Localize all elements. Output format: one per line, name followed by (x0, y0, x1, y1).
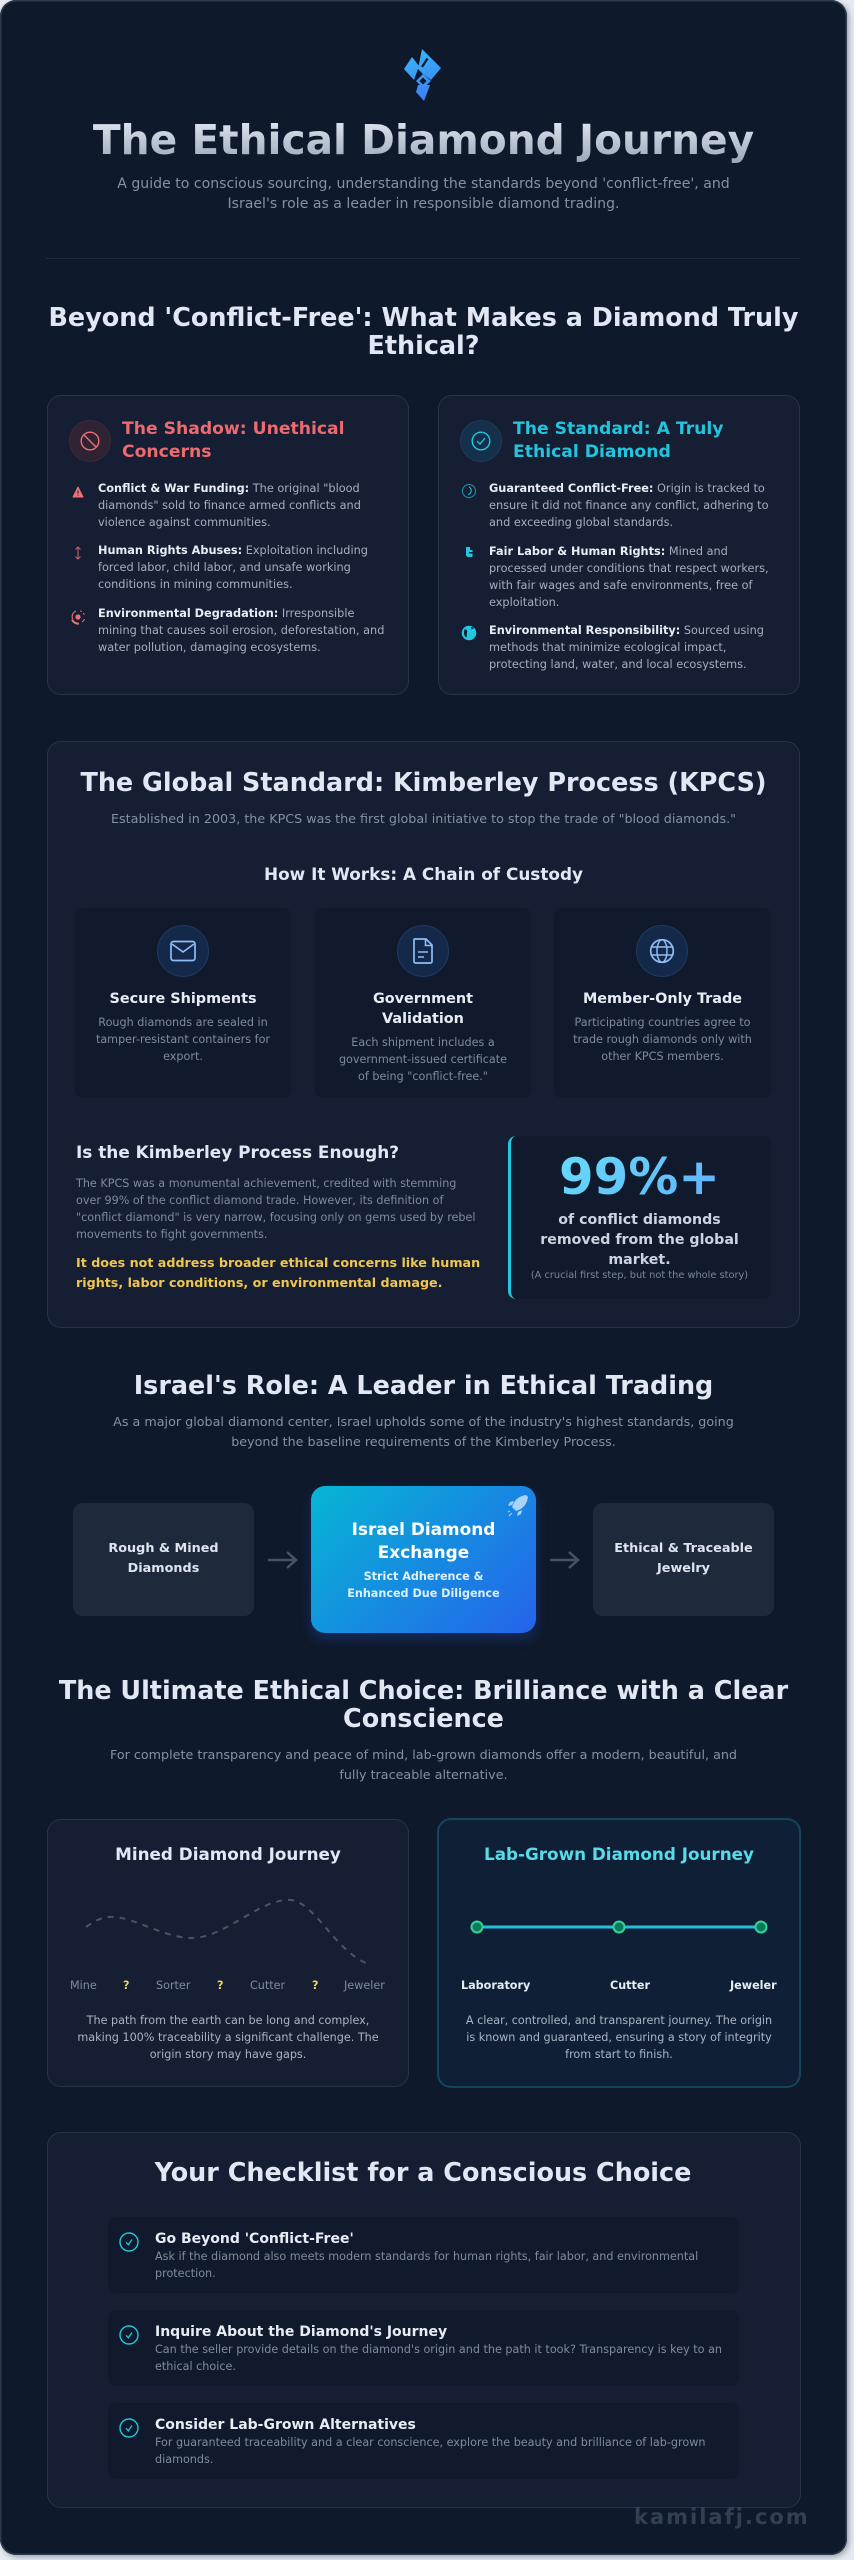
icon: check circle (460, 420, 502, 462)
text: environmental responsibility: methods that minimize ecological impact, (489, 640, 726, 654)
choice intro: For complete transparency and peace of mind, lab-grown diamonds offer a modern, beautiful, and (110, 1747, 737, 1762)
item text (155, 2248, 698, 2282)
icon: envelope (157, 925, 209, 977)
label: Jeweler (730, 1979, 777, 1992)
subheading: chain of custody: How It Works: A Chain of Custody (264, 864, 583, 884)
flow text (108, 1541, 219, 1576)
mined description (47, 2012, 409, 2062)
step text: other KPCS members. (601, 1050, 724, 1063)
step text: of being "conflict-free." (358, 1070, 488, 1083)
exchange title: Israel Diamond (352, 1519, 495, 1539)
text: human rights abuses: conditions in mining communities. (98, 578, 293, 591)
step title: Secure Shipments (109, 991, 257, 1007)
item text (155, 2341, 722, 2375)
heading: beyond conflict-free: Ethical? (367, 331, 480, 361)
chart: uncertain path (86, 1898, 366, 1964)
icon: document (397, 925, 449, 977)
label: Cutter (250, 1979, 285, 1992)
text: environmental degradation: water pollution, damaging ecosystems. (98, 640, 321, 654)
text: environmental responsibility: protecting land, water, and local ecosystems. (489, 658, 747, 670)
lab-grown description (437, 2012, 801, 2062)
icon: globe leaf (462, 626, 476, 640)
unknown: ? (123, 1979, 130, 1992)
heading: checklist: Your Checklist for a Conscious Choice (155, 2158, 691, 2188)
icon: diamond logo (404, 49, 441, 101)
step text: Participating countries agree to (574, 1016, 751, 1029)
text: conflict funding: diamonds" sold to finance armed conflicts and (98, 499, 361, 512)
text: conflict funding (98, 482, 361, 529)
exchange subtitle: Strict Adherence & (364, 1570, 483, 1582)
text: environmental degradation: mining that causes soil erosion, deforestation, and (98, 624, 384, 636)
icon: warning triangle (72, 486, 84, 498)
item text: Can the seller provide details on the diamond's origin and the path it took? Transparency is key to an (155, 2343, 722, 2356)
heading: shadow: Concerns (122, 442, 211, 462)
icon: swirl (71, 610, 85, 625)
paragraph: kpcs critique (76, 1176, 476, 1240)
flow text: Rough & Mined (108, 1541, 219, 1556)
item title: Inquire About the Diamond's Journey (155, 2324, 447, 2340)
text: guaranteed conflict-free (489, 482, 768, 529)
step: member-only trade (554, 908, 771, 1098)
stat card: 99 percent (508, 1136, 771, 1299)
exchange title: Exchange (378, 1542, 469, 1562)
flow box: rough diamonds (73, 1503, 254, 1616)
step title: Validation (382, 1011, 464, 1027)
label: Laboratory (461, 1979, 530, 1992)
chart labels (437, 1978, 801, 1994)
icon: check (119, 2232, 139, 2252)
chart labels (47, 1978, 409, 1994)
watermark: kamilafj.com (634, 2505, 810, 2529)
stat footnote: (A crucial first step, but not the whole story) (531, 1270, 748, 1281)
arrow (550, 1551, 580, 1569)
step text: Rough diamonds are sealed in (98, 1016, 268, 1029)
step: secure shipments (75, 908, 291, 1098)
flow text: Diamonds (128, 1561, 199, 1576)
unknown: ? (217, 1979, 224, 1992)
step text: trade rough diamonds only with (573, 1033, 752, 1046)
flow box: israel diamond exchange (311, 1486, 536, 1633)
panel: kimberley process (47, 741, 800, 1328)
icon: check (119, 2325, 139, 2345)
step text (96, 1016, 270, 1063)
paragraph: kpcs critique: movements to fight governments. (76, 1228, 267, 1240)
panel: the shadow (47, 395, 409, 695)
heading: lab-grown: Lab-Grown Diamond Journey (484, 1844, 754, 1864)
step title: Government (373, 991, 473, 1007)
stat caption (540, 1212, 739, 1268)
heading: beyond conflict-free: Beyond 'Conflict-Free': What Makes a Diamond Truly (49, 303, 798, 333)
choice intro (110, 1747, 737, 1782)
lab-grown description: from start to finish. (565, 2048, 673, 2060)
heading: mined: Mined Diamond Journey (115, 1844, 341, 1864)
item text: diamonds. (155, 2453, 213, 2466)
text: fair labor: processed under conditions that respect workers, (489, 562, 769, 574)
heading: standard (513, 419, 724, 462)
text: human rights abuses: Human Rights Abuses: Exploitation including (98, 544, 368, 557)
lab-grown description: A clear, controlled, and transparent journey. The origin (466, 2014, 772, 2026)
stat caption: market. (608, 1252, 671, 1268)
icon: check (119, 2418, 139, 2438)
mined description: origin story may have gaps. (150, 2048, 306, 2060)
step text: government-issued certificate (339, 1053, 507, 1066)
item text: protection. (155, 2267, 216, 2280)
label: Jeweler (344, 1979, 385, 1992)
text: environmental responsibility (489, 624, 764, 670)
item text (155, 2434, 705, 2468)
label: Cutter (610, 1979, 650, 1992)
subheading: is it enough: Is the Kimberley Process Enough? (76, 1142, 399, 1162)
label: Mine (70, 1979, 97, 1992)
title: The Ethical Diamond Journey (93, 116, 754, 164)
heading: standard: The Standard: A Truly (513, 419, 724, 439)
chart: direct path (437, 1908, 801, 1948)
label: Sorter (156, 1979, 190, 1992)
text: fair labor (489, 544, 769, 608)
icon: globe (636, 925, 688, 977)
step text (573, 1016, 752, 1063)
paragraph: kpcs critique: over 99% of the conflict diamond trade. However, its definition of (76, 1194, 443, 1206)
checklist item (108, 2310, 739, 2386)
item title: Consider Lab-Grown Alternatives (155, 2417, 416, 2433)
text: environmental responsibility: Environmental Responsibility: Sourced using (489, 624, 764, 636)
kpcs intro: Established in 2003, the KPCS was the first global initiative to stop the trade of "blood diamonds." (111, 811, 736, 826)
israel intro: As a major global diamond center, Israel upholds some of the industry's highest standards, going (113, 1414, 734, 1429)
stat number: 99%+ (559, 1148, 720, 1206)
icon: ban (69, 420, 111, 462)
item text: Ask if the diamond also meets modern standards for human rights, fair labor, and environmental (155, 2250, 698, 2263)
step text (339, 1036, 507, 1083)
heading: ultimate choice: The Ultimate Ethical Choice: Brilliance with a Clear (59, 1676, 788, 1706)
panel: checklist (47, 2132, 801, 2508)
flow text: Ethical & Traceable (614, 1541, 753, 1556)
arrow (268, 1551, 298, 1569)
text: guaranteed conflict-free: and exceeding global standards. (489, 516, 673, 529)
text: conflict funding: violence against communities. (98, 516, 271, 529)
stat caption: of conflict diamonds (558, 1212, 721, 1228)
text: guaranteed conflict-free: Guaranteed Conflict-Free: Origin is tracked to (489, 482, 765, 495)
heading: israel's role: Israel's Role: A Leader in Ethical Trading (134, 1371, 713, 1401)
exchange subtitle (347, 1570, 500, 1600)
exchange subtitle: Enhanced Due Diligence (347, 1586, 500, 1600)
panel: the standard (438, 395, 800, 695)
checklist item (108, 2403, 739, 2479)
callout: limitation (76, 1255, 480, 1290)
text: human rights abuses (98, 544, 368, 591)
text: environmental degradation (98, 606, 384, 654)
subtitle (117, 176, 730, 212)
step text: tamper-resistant containers for (96, 1033, 270, 1046)
heading: beyond conflict-free (49, 303, 798, 361)
panel: lab-grown journey (437, 1818, 801, 2088)
heading: shadow (122, 419, 345, 462)
paragraph: kpcs critique: "conflict diamond" is very narrow, focusing only on gems used by rebel (76, 1210, 476, 1224)
flow text (614, 1541, 753, 1576)
step: government validation (315, 908, 531, 1098)
paragraph: kpcs critique: The KPCS was a monumental achievement, credited with stemming (76, 1176, 456, 1190)
text: conflict funding: Conflict & War Funding: The original "blood (98, 482, 360, 495)
step text: export. (163, 1050, 203, 1063)
step title: Member-Only Trade (583, 991, 742, 1007)
text: environmental degradation: Environmental Degradation: Irresponsible (98, 606, 354, 620)
text: human rights abuses: forced labor, child labor, and unsafe working (98, 561, 351, 574)
heading: kpcs: The Global Standard: Kimberley Process (KPCS) (80, 768, 767, 798)
israel intro (113, 1414, 734, 1449)
icon: hand (466, 547, 472, 557)
mined description: The path from the earth can be long and complex, (87, 2014, 369, 2026)
unknown: ? (312, 1979, 318, 1992)
choice intro: fully traceable alternative. (339, 1767, 508, 1782)
callout: limitation: rights, labor conditions, or environmental damage. (76, 1275, 442, 1290)
flow box: ethical jewelry (593, 1503, 774, 1616)
item title: Go Beyond 'Conflict-Free' (155, 2231, 354, 2247)
panel: mined journey (47, 1819, 409, 2087)
stat caption: removed from the global (540, 1232, 739, 1248)
heading: ultimate choice: Conscience (343, 1704, 504, 1734)
icon: rocket (508, 1495, 528, 1516)
step title (373, 991, 473, 1027)
step text: Each shipment includes a (351, 1036, 495, 1049)
flow text: Jewelry (657, 1561, 710, 1576)
text: fair labor: exploitation. (489, 596, 559, 608)
exchange title (352, 1519, 495, 1562)
mined description: making 100% traceability a significant challenge. The (77, 2030, 379, 2044)
callout: limitation: It does not address broader ethical concerns like human (76, 1255, 480, 1270)
lab-grown description: is known and guaranteed, ensuring a story of integrity (466, 2030, 772, 2044)
subtitle: A guide to conscious sourcing, understanding the standards beyond 'conflict-free', and (117, 176, 730, 192)
heading: shadow: The Shadow: Unethical (122, 419, 345, 439)
item text: ethical choice. (155, 2360, 236, 2373)
item text: For guaranteed traceability and a clear conscience, explore the beauty and brilliance of lab-grown (155, 2436, 705, 2449)
heading: standard: Ethical Diamond (513, 442, 671, 462)
stat number (508, 1147, 771, 1207)
text: fair labor: Fair Labor & Human Rights: Mined and (489, 544, 728, 558)
heading: ultimate choice (59, 1676, 788, 1734)
subtitle: Israel's role as a leader in responsible diamond trading. (227, 196, 620, 212)
icon: vertical arrows (75, 546, 81, 560)
checklist item (108, 2217, 739, 2293)
text: fair labor: with fair wages and safe environments, free of (489, 578, 753, 592)
icon: progress ring (462, 484, 476, 498)
israel intro: beyond the baseline requirements of the Kimberley Process. (231, 1434, 616, 1449)
text: guaranteed conflict-free: ensure it did not finance any conflict, adhering to (489, 499, 768, 512)
